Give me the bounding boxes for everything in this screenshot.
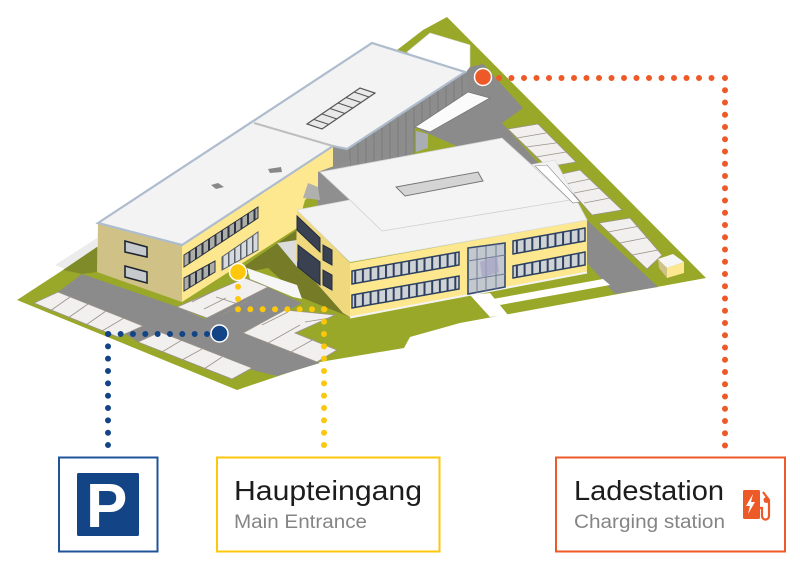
connector: parking <box>108 325 228 446</box>
parking box <box>59 458 158 552</box>
front window band upper <box>184 207 258 267</box>
path along the front lawn <box>493 279 610 305</box>
wing front wall <box>182 146 333 302</box>
roof ledge right <box>535 165 580 203</box>
charging heading: Ladestation <box>574 475 724 506</box>
hall lower roof <box>297 160 587 262</box>
outbuilding end wall <box>658 259 667 278</box>
rear wing grey facade <box>333 72 468 175</box>
parking marker <box>211 325 228 342</box>
entrance box frame <box>217 458 440 552</box>
entrance path <box>470 293 508 317</box>
band upper left <box>352 252 459 284</box>
hall glass entrance <box>468 243 505 294</box>
wing rear door <box>416 131 428 152</box>
end wall window lower <box>125 266 147 283</box>
facade ribs <box>350 75 462 175</box>
hall base line <box>350 272 587 318</box>
shaded lawn beside the wing end <box>63 247 97 274</box>
hall front wall <box>350 220 587 317</box>
roof joint <box>254 123 333 146</box>
canopy at charging station <box>415 92 490 132</box>
band lower right <box>513 252 585 278</box>
hall building <box>296 138 610 318</box>
small outbuilding <box>658 254 684 278</box>
icon: charging pump <box>743 490 770 520</box>
road at charging station <box>420 64 540 165</box>
left wall small window lower <box>323 270 332 290</box>
hall rear grey wall <box>318 160 350 210</box>
parking bay north-east 2 <box>557 170 622 215</box>
connector: main entrance <box>230 264 325 446</box>
band lower left <box>352 276 459 308</box>
entrance heading: Haupteingang <box>234 475 422 506</box>
connector: charging station <box>474 68 725 447</box>
parking bay east of junction <box>243 310 337 362</box>
charging subheading: Charging station <box>574 512 725 533</box>
end wall window upper <box>125 241 147 257</box>
wing roof <box>98 43 465 245</box>
parking box frame <box>59 458 158 552</box>
site plan: isometric building illustration <box>17 17 706 390</box>
charging station box <box>556 458 785 552</box>
ground shadow at left <box>55 238 97 272</box>
hall left wall <box>296 210 350 317</box>
dotted line to parking box <box>108 334 207 446</box>
parking bay north-east 3 <box>599 218 662 269</box>
road to the right of the hall <box>575 200 658 294</box>
left wall band lower <box>298 245 320 285</box>
hall upper roof <box>320 138 570 231</box>
main entrance box <box>217 458 440 552</box>
parking bay west <box>34 292 143 337</box>
roof hatch 2 <box>268 167 282 173</box>
parking bay centre <box>177 278 268 318</box>
charging box frame <box>556 458 785 552</box>
white upper block behind the wing <box>407 33 470 75</box>
green ground plot <box>17 17 706 390</box>
hall side stair <box>277 240 297 267</box>
access road network <box>58 64 658 376</box>
wing end wall <box>97 223 182 302</box>
front window bands <box>352 228 585 308</box>
wing entrance glazing <box>222 232 258 270</box>
outbuilding front wall <box>667 262 684 278</box>
roof skylight <box>307 88 375 129</box>
parking bays <box>34 124 662 379</box>
outbuilding roof <box>658 254 684 268</box>
hall skylight <box>396 172 483 196</box>
entrance marker <box>230 264 246 280</box>
band upper right <box>513 228 585 254</box>
parking bay south <box>138 332 252 379</box>
shaded lawn between the buildings <box>232 230 350 317</box>
dotted line to entrance box <box>238 287 325 446</box>
left wall small window upper <box>323 245 332 265</box>
long wing <box>97 43 490 302</box>
yard stair <box>303 183 320 200</box>
dotted line along the top <box>499 75 712 81</box>
bay dividers <box>50 133 658 369</box>
left wall windows <box>297 216 332 290</box>
charging marker <box>474 68 492 86</box>
main road left <box>58 274 320 376</box>
parking bay north-east 1 <box>508 124 576 167</box>
parking sign square <box>77 473 139 536</box>
dotted line down to charging box <box>722 78 728 447</box>
roof hatch 1 <box>211 183 224 189</box>
front window band lower <box>184 261 215 291</box>
left wall band upper <box>297 216 320 252</box>
parking sign letter: P <box>86 472 127 541</box>
entrance subheading: Main Entrance <box>234 512 367 533</box>
entrance steps <box>247 268 302 299</box>
